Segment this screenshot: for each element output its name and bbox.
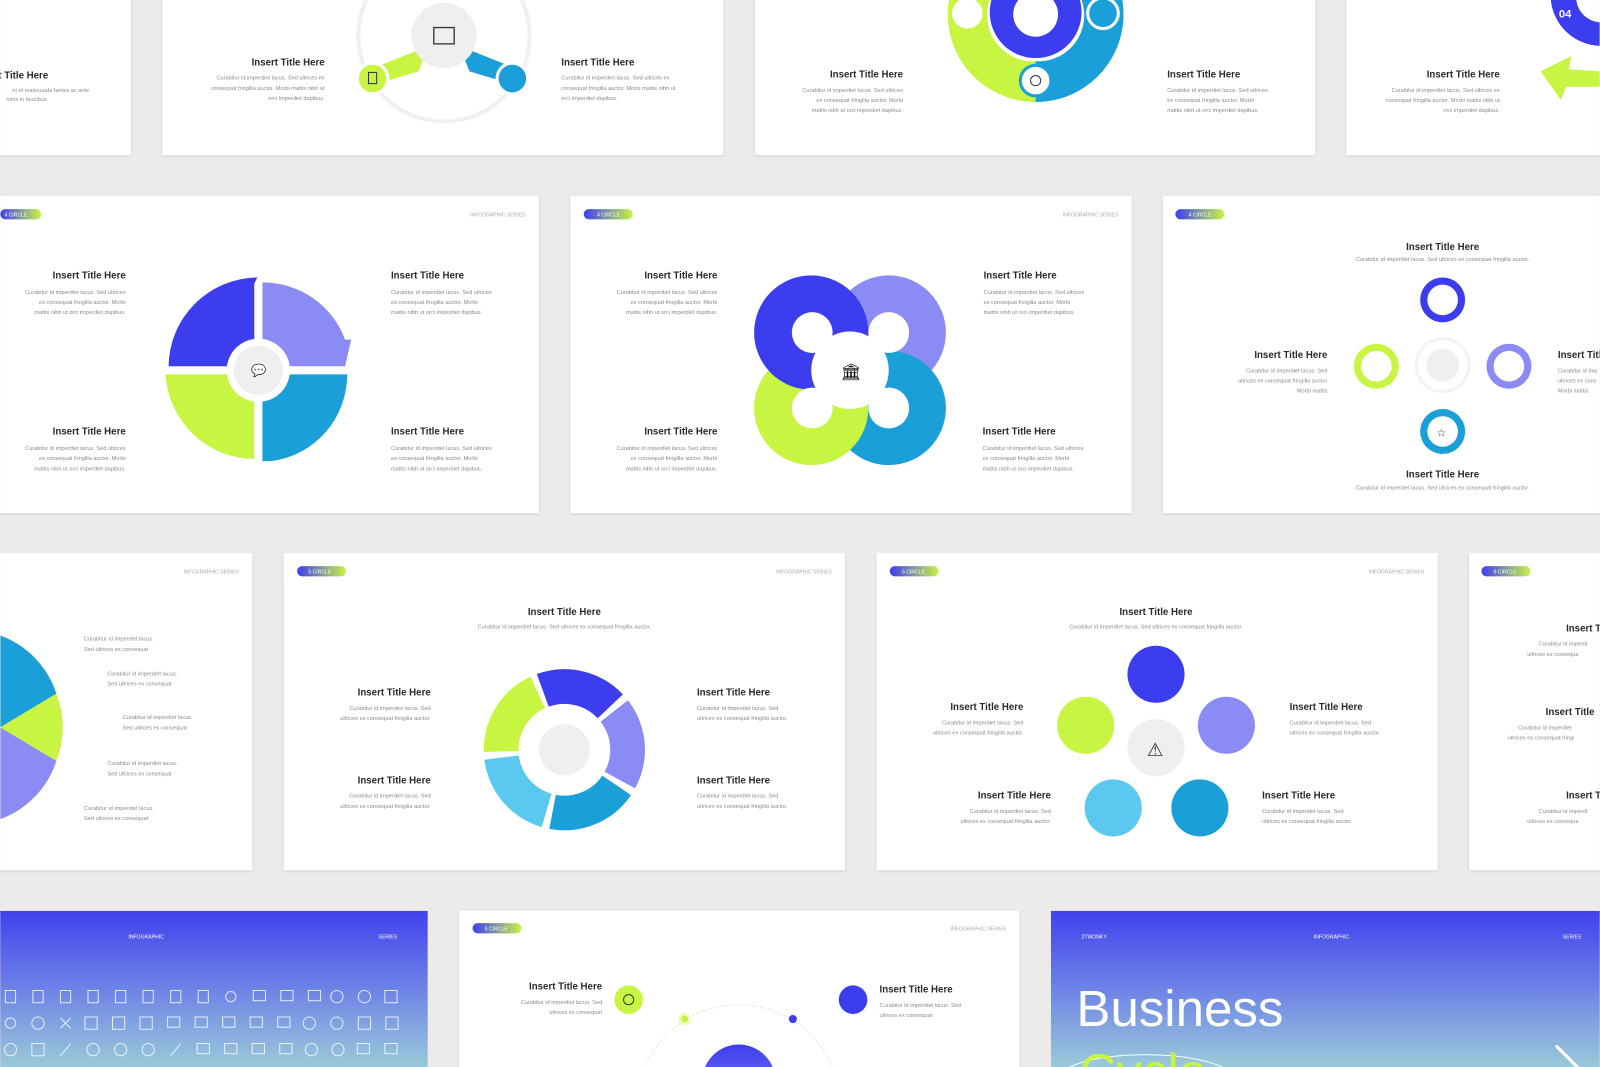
card: row1 partial left [0,0,131,155]
card: 5 circles: Curabitur id imperdiet lacus. Sed [942,720,1023,726]
card: 4 overlapping circles: Curabitur id imperdiet lacus. Sed ultrices [617,290,718,296]
card: 4 overlapping circles: 🏛 [841,362,862,381]
card: 5 circles: Curabitur id imperdiet lacus. Sed [1290,720,1371,726]
card: 4 overlapping circles: ex consequat fringilla auctor. Morbi [983,456,1069,462]
card: row3 partial pie: Sed ultrices ex consequat [107,681,172,687]
card: 5 circles: Curabitur id imperdiet lacus. Sed [1262,809,1343,815]
card: donut top: Insert Title Here [830,70,904,81]
card: three-arm circle: consequat fringilla auctor. Morbi mattis nibh ut [561,86,676,92]
card: 5 arrow cycle: INFOGRAPHIC SERIES [776,569,832,575]
card: donut top: mattis nibh ut orci imperdiet dapibus. [812,108,903,114]
card: donut top: ex consequat fringilla auctor. Morbi [816,98,903,104]
card: 4 overlapping circles: 4 CIRCLE [597,212,621,218]
card: 4 pins: ☆ [1437,428,1447,440]
card: 4 overlapping circles [570,196,1132,513]
card: row3 partial pie: Curabitur id imperdiet lacus. [123,715,193,721]
card: row1 right partial: 04 [1559,8,1572,20]
card: 4 overlapping circles: mattis nibh ut orci imperdiet dapibus. [626,466,718,472]
card: 5 circles: Curabitur id imperdiet lacus. Sed ultrices ex consequat fringilla auctor. [1069,624,1243,630]
card: title Business Cycle: SERIES [1563,934,1582,940]
card: 5 arrow cycle: ultrices ex consequat fringilla auctor. [697,804,788,810]
card: row3 partial pie: Curabitur id imperdiet lacus. [84,806,154,812]
card: three-arm circle: Insert Title Here [561,57,635,68]
card: title Business Cycle: Business [1076,980,1283,1037]
card: row3 right partial: ultrices ex consequa [1527,652,1579,658]
card: 4 circle pie: Curabitur id imperdiet lacus. Sed ultrices [391,290,492,296]
card: 5 arrow cycle: ultrices ex consequat fringilla auctor. [340,804,431,810]
card: 4 pins: Curabitur id imperdiet lacus. Sed ultrices ex consequat fringilla auctor. [1356,257,1530,263]
card: row1 right partial: Insert Title Here [1427,70,1500,81]
card: row3 partial pie: Sed ultrices ex consequat [123,725,187,731]
card: row3 partial pie: Curabitur id imperdiet lacus. [107,761,178,767]
card: 4 circle pie: Curabitur id imperdiet lacus. Sed ultrices [25,290,126,296]
card: 4 circle pie: Curabitur id imperdiet lacus. Sed ultrices [391,446,492,452]
card: title Business Cycle: INFOGRAPHIC [1314,934,1349,940]
card: three-arm circle: Insert Title Here [252,57,325,68]
card: title Business Cycle [1051,911,1600,1067]
card: 4 circle pie: Curabitur id imperdiet lacus. Sed ultrices [25,446,126,452]
card: row3 right partial [1469,553,1600,870]
card: 5 circles: Insert Title Here [1119,607,1193,618]
card: 4 circle pie: 💬 [251,362,266,377]
card: 4 circle pie: mattis nibh ut orci imperdiet dapibus. [391,466,483,472]
card: 4 circle pie: Insert Title Here [391,270,465,281]
card: 4 pins: Morbi mattis [1297,389,1328,395]
card: 5 arrow cycle: Curabitur id imperdiet lacus. Sed [697,706,778,712]
card: icon set blue: INFOGRAPHIC [128,934,164,940]
card: 5 arrow cycle [284,553,845,870]
card: 5 arrow cycle: Insert Title Here [697,775,771,786]
card: row3 right partial: Insert Title [1546,707,1595,718]
card: 5 arrow cycle: ultrices ex consequat fringilla auctor. [340,716,431,722]
card: icon set blue [0,911,428,1067]
card: 5 arrow cycle: Curabitur id imperdiet lacus. Sed [697,794,778,800]
card: donut top [755,0,1315,155]
card: 4 circle pie: mattis nibh ut orci imperdiet dapibus. [391,310,483,316]
card: 5 arrow cycle: 5 CIRCLE [308,569,332,575]
card: 4 overlapping circles: ex consequat fringilla auctor. Morbi [631,300,717,306]
card: row3 partial pie: Curabitur id imperdiet lacus. [84,637,154,643]
card: 4 pins: Curabitur id imp [1558,368,1598,374]
card: 4 overlapping circles: Insert Title Here [984,270,1057,281]
card: row3 partial pie: INFOGRAPHIC SERIES [183,569,240,575]
card: 5 circles: Insert Title Here [1290,702,1363,713]
card: 5 circles [877,553,1438,870]
card: row1 partial left: m et malesuada fames ac ante [12,88,89,94]
card: three-arm circle: consequat fringilla auctor. Morbi mattis nibh ut [211,86,325,92]
card: 5 circles: ultrices ex consequat fringilla auctor. [1290,730,1380,736]
card: 6 circle orbit: 6 CIRCLE [485,926,508,932]
card: 4 overlapping circles: mattis nibh ut orci imperdiet dapibus. [984,310,1075,316]
card: 5 circles: ⚠ [1147,739,1163,760]
card: 4 pins: ultrices ex cons [1558,379,1597,385]
card: 4 overlapping circles: Curabitur id imperdiet lacus. Sed ultrices [984,290,1085,296]
card: donut top: mattis nibh ut orci imperdiet dapibus. [1167,108,1259,114]
card: 6 circle orbit: ultrices ex consequat [549,1010,603,1016]
card: 5 arrow cycle: Curabitur id imperdiet lacus. Sed ultrices ex consequat fringilla auctor. [478,624,651,630]
card: three-arm circle [162,0,723,155]
card: 5 circles: ultrices ex consequat fringilla auctor. [933,730,1024,736]
card: 6 circle orbit: Curabitur id imperdiet lacus. Sed [521,1000,602,1006]
card: 6 circle orbit: INFOGRAPHIC SERIES [951,926,1007,932]
card: 4 pins: Insert Title Here [1406,469,1480,480]
card: 4 overlapping circles: Insert Title Here [644,270,718,281]
card: 4 circle pie: ex consequat fringilla auctor. Morbi [391,300,478,306]
card: 4 overlapping circles: ex consequat fringilla auctor. Morbi [631,456,717,462]
card: 4 circle pie: ex consequat fringilla auctor. Morbi [39,456,126,462]
card: donut top: Insert Title Here [1167,70,1241,81]
card: 5 arrow cycle: Insert Title Here [358,688,431,699]
card: 4 pins [1163,196,1600,513]
card: 4 circle pie [0,196,539,513]
card: row3 right partial: ultrices ex consequat fringi [1508,736,1574,742]
card: title Business Cycle: 2TWONKY [1082,934,1107,940]
card: 4 circle pie: INFOGRAPHIC SERIES [470,212,526,218]
card: 4 pins: Curabitur id imperdiet lacus. Sed [1246,368,1327,374]
card: 4 circle pie: mattis nibh ut orci imperdiet dapibus. [34,466,126,472]
card: 4 pins: ultrices ex consequat fringilla auctor [1238,379,1327,385]
card: 4 overlapping circles: Curabitur id imperdiet lacus. Sed ultrices [617,446,718,452]
card: 4 circle pie: ex consequat fringilla auctor. Morbi [39,300,126,306]
card: 4 circle pie: mattis nibh ut orci imperdiet dapibus. [34,310,126,316]
card: donut top: ex consequat fringilla auctor. Morbi [1167,98,1254,104]
card: 5 arrow cycle: Insert Title Here [358,775,431,786]
card: row3 right partial: ultrices ex consequa [1527,819,1579,825]
card: 4 circle pie: Insert Title Here [53,270,126,281]
card: donut top: Curabitur id imperdiet lacus. Sed ultrices [1167,88,1268,94]
card: 4 overlapping circles: ex consequat fringilla auctor. Morbi [984,300,1070,306]
card: row1 right partial: consequat fringilla auctor. Morbi mattis nibh ut [1386,98,1500,104]
card: row3 right partial: Curabitur id imperdi [1539,642,1587,648]
card: 4 circle pie: Insert Title Here [391,427,465,438]
card: row1 partial left: rimis in faucibus. [6,97,49,103]
card: 6 circle orbit: Curabitur id imperdiet lacus. Sed [880,1003,961,1009]
card: 5 circles: 5 CIRCLE [902,569,926,575]
card: 6 circle orbit: Insert Title Here [880,985,953,996]
card: 4 overlapping circles: INFOGRAPHIC SERIES [1063,212,1119,218]
card: icon set blue: SERIES [379,934,398,940]
card: 4 overlapping circles: Insert Title Here [644,427,718,438]
card: 4 overlapping circles: Curabitur id imperdiet lacus. Sed ultrices [983,446,1083,452]
card: row3 partial pie: Sed ultrices ex consequat [84,816,149,822]
card: 5 arrow cycle: Insert Title Here [697,688,771,699]
card: row3 right partial: 6 CIRCLE [1494,569,1517,575]
card: 5 circles: INFOGRAPHIC SERIES [1369,569,1425,575]
card: row3 partial pie: Curabitur id imperdiet lacus. [107,671,178,677]
card: 4 pins: Insert Title Here [1406,242,1480,253]
card: row3 partial pie [0,553,252,870]
card: three-arm circle: orci imperdiet dapibus. [561,96,618,102]
card: row1 right partial: Curabitur id imperdiet lacus. Sed ultrices ex [1392,88,1500,94]
card: three-arm circle: Curabitur id imperdiet lacus. Sed ultrices ex [561,76,670,82]
card: 5 circles: Curabitur id imperdiet lacus. Sed [970,809,1051,815]
card: 5 circles: Insert Title Here [978,791,1052,802]
card: 4 pins: Curabitur id imperdiet lacus. Sed ultrices ex consequat fringilla auctor. [1356,486,1530,492]
card: 4 pins: Morbi mattis [1558,389,1589,395]
card: row3 partial pie: Sed ultrices ex consequat [84,647,149,653]
card: 4 overlapping circles: mattis nibh ut orci imperdiet dapibus. [626,310,718,316]
card: three-arm circle: Curabitur id imperdiet lacus. Sed ultrices ex [216,76,325,82]
card: three-arm circle: orci imperdiet dapibus. [268,96,325,102]
card: 6 circle orbit: ultrices ex consequat [880,1013,933,1019]
card: 4 pins: Insert Title Here [1254,350,1328,361]
card: 5 arrow cycle: ultrices ex consequat fringilla auctor. [697,716,788,722]
card: 4 circle pie: ex consequat fringilla auctor. Morbi [391,456,478,462]
card: 6 circle orbit: Insert Title Here [529,981,603,992]
card: 4 overlapping circles: mattis nibh ut orci imperdiet dapibus. [983,466,1074,472]
card: 5 circles: ultrices ex consequat fringilla auctor. [961,819,1051,825]
card: 4 circle pie: 4 CIRCLE [4,212,28,218]
card: 4 pins: 4 CIRCLE [1189,212,1212,218]
card: row1 right partial [1347,0,1600,155]
card: row1 right partial: orci imperdiet dapibus. [1443,108,1500,114]
card: 5 arrow cycle: Curabitur id imperdiet lacus. Sed [349,794,431,800]
card: row3 right partial: Curabitur id imperdi [1539,809,1587,815]
card: 5 circles: ultrices ex consequat fringilla auctor. [1262,819,1353,825]
card: row3 partial pie: Sed ultrices ex consequat [107,771,172,777]
card: 4 overlapping circles: Insert Title Here [983,427,1056,438]
card: 5 circles: Insert Title Here [950,702,1024,713]
card: 5 arrow cycle: Insert Title Here [528,607,601,618]
card: 6 circle orbit [459,911,1019,1067]
card: 4 circle pie: Insert Title Here [53,427,126,438]
card: row3 right partial: Curabitur id imperdiet [1518,725,1572,731]
card: donut top: Curabitur id imperdiet lacus. Sed ultrices [802,88,903,94]
card: 5 circles: Insert Title Here [1262,791,1336,802]
card: 5 arrow cycle: Curabitur id imperdiet lacus. Sed [349,706,431,712]
